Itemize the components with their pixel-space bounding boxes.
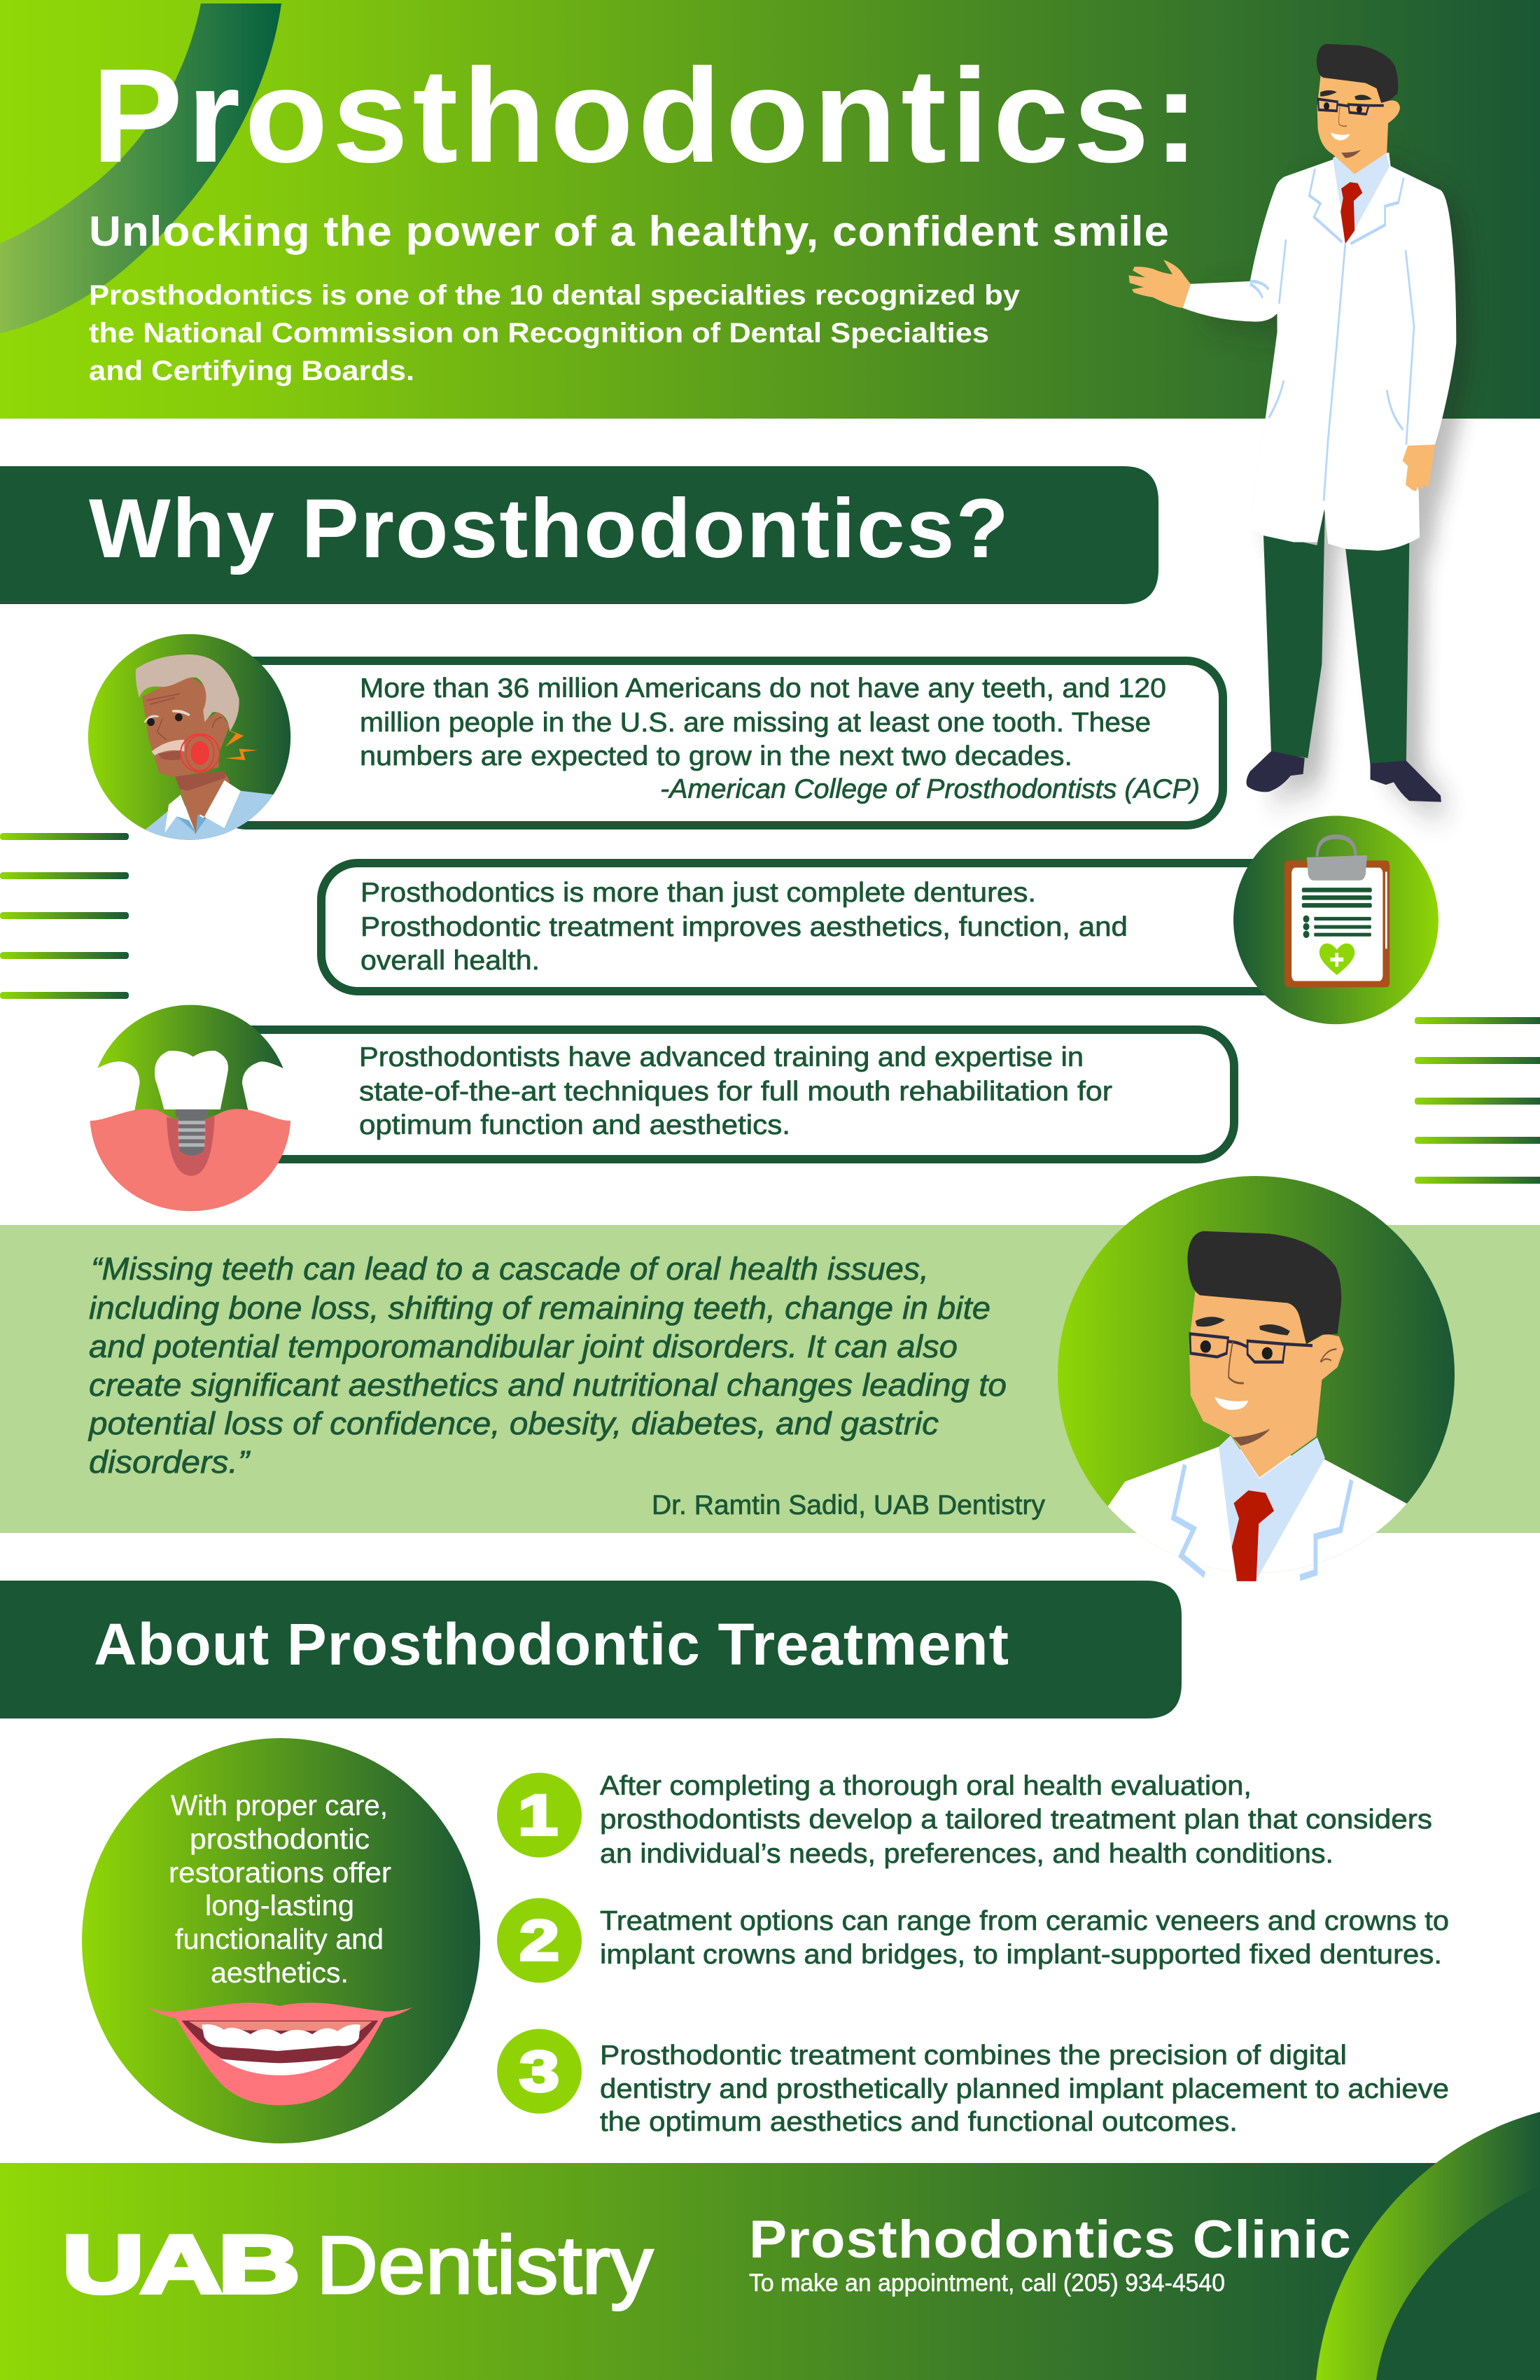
card 3: advanced training: state-of-the-art techniques for full mouth rehabilitation for [359,1077,1112,1107]
step 2: Treatment options can range from ceramic veneers and crowns to [600,1906,1449,1936]
heading bar: why prosthodontics: Why Prosthodontics? [89,482,1010,575]
heading bar: about prosthodontic treatment [0,1581,1182,1718]
icon: smile [148,2003,412,2106]
intro paragraph [89,280,1021,386]
card 2: more than dentures: overall health. [360,946,540,976]
icon: older man with jaw pain [88,634,294,852]
white coat [1107,1446,1407,1573]
pants [1264,506,1325,758]
card 1: statistics: -American College of Prosthodontists (ACP) [660,774,1200,804]
heading bar: about prosthodontic treatment: About Prosthodontic Treatment [94,1611,1009,1677]
card 1: statistics: More than 36 million Americans do not have any teeth, and 120 [360,673,1166,704]
step 1: 1 [518,1784,558,1847]
panel: lasting restorations [82,1738,480,2143]
step 3: 3 [519,2040,559,2104]
circle text: functionality and [175,1923,384,1955]
clinic name: Prosthodontics Clinic [749,2210,1352,2269]
step 3: Prosthodontic treatment combines the precision of digital [600,2040,1347,2071]
intro paragraph: Prosthodontics is one of the 10 dental specialties recognized by [89,280,1021,311]
face [1317,69,1400,174]
side lines left [0,833,129,999]
coat seams [1250,169,1414,501]
step 2: implant crowns and bridges, to implant-supported fixed dentures. [600,1940,1442,1970]
card 1: statistics [210,661,1223,825]
step 1: an individual’s needs, preferences, and health conditions. [600,1839,1334,1869]
footer panel [0,2112,1540,2380]
illustration: standing doctor [1128,44,1472,811]
quote band: create significant aesthetics and nutritional changes leading to [89,1367,1007,1403]
quote band: Dr. Ramtin Sadid, UAB Dentistry [652,1490,1045,1520]
shirt collar [1333,153,1390,241]
right hand [1403,444,1435,491]
icon: dental implant [85,1005,297,1211]
step 1 [497,1771,1432,1869]
header panel [0,0,1540,419]
quote band: including bone loss, shifting of remaining teeth, change in bite [89,1290,990,1326]
circle text: prosthodontic [190,1823,370,1855]
icon: clipboard [1233,816,1438,1024]
circle text: long-lasting [205,1889,354,1921]
circle text [169,1789,391,1989]
step 3 [497,2029,1449,2137]
card 3: advanced training [210,1030,1234,1159]
decorative arc bottom-right [1316,2112,1540,2380]
logo: UAB Dentistry: Dentistry [316,2219,654,2311]
card 3: advanced training: Prosthodontists have advanced training and expertise in [359,1042,1084,1072]
tie [1340,182,1362,244]
quote band: “Missing teeth can lead to a cascade of oral health issues, [91,1251,929,1287]
card 3: advanced training: optimum function and aesthetics. [359,1110,790,1140]
decorative arc top-left [0,4,281,333]
quote band: potential loss of confidence, obesity, diabetes, and gastric [88,1406,939,1441]
logo: UAB Dentistry: UAB [62,2218,296,2310]
card 2: more than dentures [321,863,1329,991]
portrait: doctor bust [1058,1176,1455,1581]
quote band: disorders.” [89,1444,251,1480]
circle text: With proper care, [171,1789,388,1821]
coat [1183,153,1456,551]
step 2: 2 [519,1909,559,1973]
shoes [1247,751,1305,792]
circle text: aesthetics. [211,1956,349,1989]
circle text: restorations offer [169,1856,391,1889]
step 1: After completing a thorough oral health evaluation, [600,1771,1252,1801]
card 2: more than dentures: Prosthodontics is more than just complete dentures. [360,878,1036,908]
appointment line: To make an appointment, call (205) 934-4540 [749,2269,1225,2297]
card 1: statistics: numbers are expected to grow in the next two decades. [360,741,1072,771]
quote band: and potential temporomandibular joint disorders. It can also [89,1329,958,1364]
step 3: the optimum aesthetics and functional outcomes. [600,2107,1238,2137]
heading bar: why prosthodontics [0,466,1158,604]
step 2 [497,1898,1449,1982]
logo: UAB Dentistry [62,2218,654,2311]
side lines right [1415,1017,1540,1184]
intro paragraph: and Certifying Boards. [89,356,414,386]
card 1: statistics: million people in the U.S. are missing at least one tooth. These [360,708,1151,738]
hair [1317,44,1398,103]
title: Prosthodontics: [92,41,1203,190]
step 1: prosthodontists develop a tailored treatment plan that considers [600,1805,1432,1835]
subtitle: Unlocking the power of a healthy, confident smile [89,208,1170,255]
quote band [0,1225,1540,1533]
left hand [1128,260,1191,308]
intro paragraph: the National Commission on Recognition of Dental Specialties [89,318,989,349]
step 3: dentistry and prosthetically planned implant placement to achieve [600,2074,1449,2104]
card 2: more than dentures: Prosthodontic treatment improves aesthetics, function, and [360,912,1128,942]
